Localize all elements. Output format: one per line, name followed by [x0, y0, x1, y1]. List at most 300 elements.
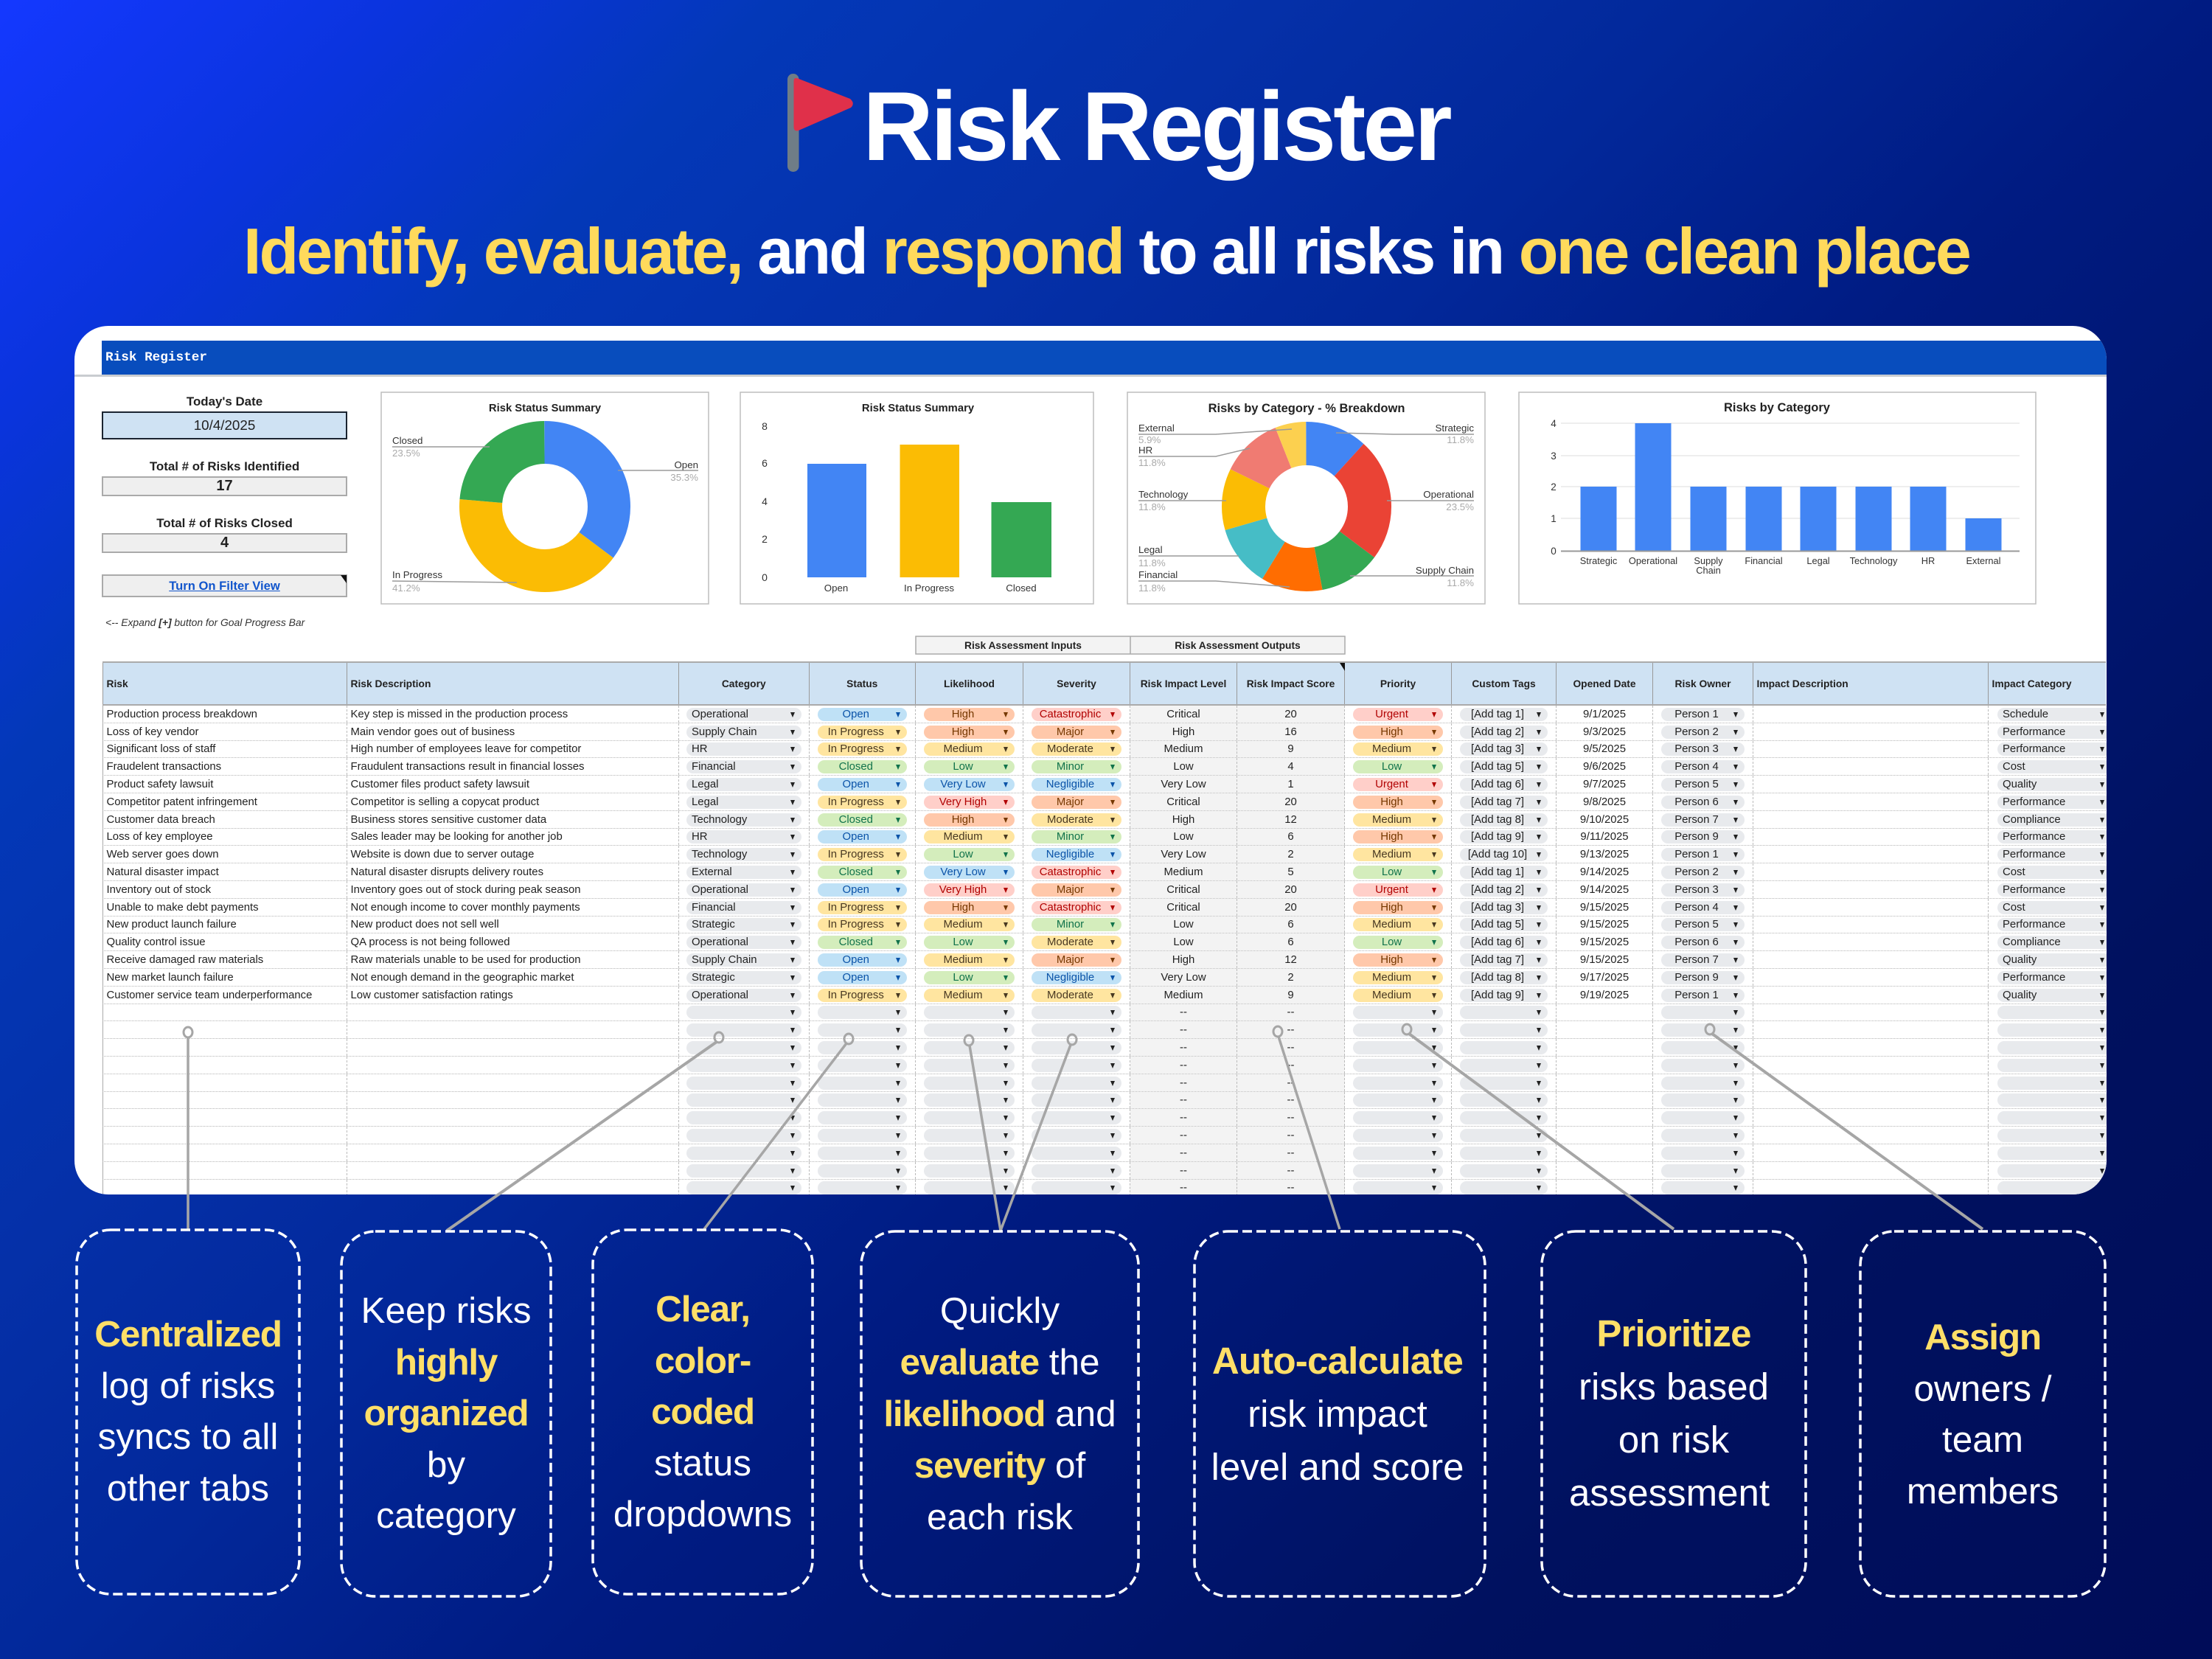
table data rows: Receive damaged raw materials	[106, 954, 263, 966]
table data rows: Natural disaster disrupts delivery routes	[351, 866, 543, 878]
chart: risk status bars: In Progress	[904, 582, 954, 594]
chart: risks by category bars: HR	[1921, 555, 1935, 566]
table data rows: Key step is missed in the production process	[351, 709, 568, 720]
connector: likelihood	[964, 1035, 1001, 1231]
table data rows: --	[1180, 1060, 1187, 1071]
total risks closed value: 4	[220, 535, 229, 551]
chart: risk status bars: 6	[762, 457, 768, 469]
table data rows: Moderate	[1047, 990, 1093, 1001]
table data rows: Critical	[1166, 709, 1200, 720]
charts	[380, 392, 2037, 655]
table data rows: New product does not sell well	[351, 919, 499, 931]
risk assessment group headers: Risk Assessment Inputs	[964, 640, 1082, 651]
table data rows: Performance	[2003, 884, 2065, 896]
table data rows: High	[1380, 831, 1403, 843]
table data rows: Schedule	[2003, 709, 2048, 720]
table data rows: Inventory goes out of stock during peak season	[351, 884, 581, 896]
table data rows: HR	[692, 831, 708, 843]
table data rows: --	[1180, 1130, 1187, 1141]
table data rows: 4	[1287, 761, 1294, 773]
table data rows: Supply Chain	[692, 954, 757, 966]
connector: severity	[1001, 1034, 1077, 1231]
table data rows: High number of employees leave for competitor	[351, 743, 581, 755]
table data rows: --	[1287, 1182, 1294, 1194]
callout: color-coded status: coded	[651, 1391, 754, 1432]
table data rows: High	[952, 709, 974, 720]
table data rows: Negligible	[1046, 972, 1094, 984]
table data rows: --	[1287, 1130, 1294, 1141]
chart: category donut: 11.8%	[1447, 577, 1474, 588]
table data rows: Person 2	[1674, 726, 1719, 738]
table data rows: Person 9	[1674, 831, 1719, 843]
table data rows: Medium	[1164, 743, 1203, 755]
chart: risk status donut: 23.5%	[392, 448, 420, 459]
table data rows: Inventory out of stock	[106, 884, 211, 896]
table header row: Impact Description	[1756, 678, 1848, 689]
table data rows: 16	[1284, 726, 1297, 738]
chart: category donut: Supply Chain	[1416, 565, 1474, 576]
table data rows: Performance	[2003, 972, 2065, 984]
callout: color-coded status: Clear,	[655, 1289, 750, 1329]
table data rows: Performance	[2003, 796, 2065, 808]
callout: likelihood and severity: Quickly	[940, 1290, 1060, 1331]
total risks identified value: 17	[216, 478, 233, 494]
callout: color-coded status: color-	[655, 1340, 751, 1380]
table data rows: [Add tag 2]	[1471, 726, 1524, 738]
table data rows: Quality	[2003, 779, 2037, 790]
table data rows: Compliance	[2003, 814, 2061, 826]
callout: highly organized: category	[376, 1495, 516, 1536]
callout: prioritize	[1540, 1230, 1807, 1598]
callout: likelihood and severity: each risk	[927, 1497, 1073, 1537]
table data rows: Medium	[1372, 849, 1411, 860]
table data rows: 9/8/2025	[1583, 796, 1626, 808]
chart: risk status donut: 41.2%	[392, 582, 420, 594]
table header row: Priority	[1380, 678, 1416, 689]
risk assessment group headers: Risk Assessment Outputs	[1175, 640, 1301, 651]
table data rows: Open	[843, 831, 869, 843]
subtitle: Identify, evaluate, and respond to all risks in one clean place	[243, 215, 1969, 288]
table data rows: Negligible	[1046, 779, 1094, 790]
table data rows: 20	[1284, 796, 1297, 808]
table data rows: Person 1	[1674, 990, 1719, 1001]
callout: assign owners: members	[1907, 1470, 2059, 1512]
chart: risk status donut: 35.3%	[670, 472, 698, 483]
connector: auto-calculate	[1273, 1026, 1340, 1229]
table data rows: High	[952, 902, 974, 914]
chart: risks by category bars: Financial	[1745, 555, 1783, 566]
callout: centralized log	[75, 1228, 301, 1596]
connector: centralized	[184, 1027, 192, 1229]
table data rows: Production process breakdown	[106, 709, 257, 720]
table data rows: Major	[1057, 726, 1084, 738]
table data rows: Medium	[944, 831, 982, 843]
table data rows: --	[1180, 1042, 1187, 1054]
table data rows: Moderate	[1047, 936, 1093, 948]
table data rows: 9/14/2025	[1580, 866, 1629, 878]
table data rows: Medium	[944, 954, 982, 966]
table data rows: Person 1	[1674, 709, 1719, 720]
table data rows: Low	[1173, 936, 1194, 948]
connector: color coded	[704, 1034, 853, 1229]
chart: risks by category bars: Technology	[1850, 555, 1898, 566]
table data rows: --	[1180, 1165, 1187, 1177]
table data rows: [Add tag 9]	[1471, 990, 1524, 1001]
table data rows: Quality	[2003, 990, 2037, 1001]
table header row	[102, 661, 2106, 706]
table data rows: Catastrophic	[1040, 709, 1101, 720]
table data rows: [Add tag 10]	[1468, 849, 1527, 860]
chart: category donut: Financial	[1138, 569, 1178, 580]
table data rows: 20	[1284, 709, 1297, 720]
table data rows: Person 6	[1674, 936, 1719, 948]
callout: prioritize: assessment	[1569, 1472, 1770, 1514]
table data rows: Person 7	[1674, 954, 1719, 966]
table data rows: Medium	[1164, 866, 1203, 878]
total risks identified value	[102, 476, 347, 496]
chart: risk status donut: Closed	[392, 435, 422, 446]
table data rows: Medium	[1372, 990, 1411, 1001]
callout: centralized log: Centralized	[94, 1314, 282, 1354]
table data rows: [Add tag 1]	[1471, 709, 1524, 720]
table data rows: --	[1180, 1077, 1187, 1089]
table data rows: Performance	[2003, 831, 2065, 843]
table data rows: Negligible	[1046, 849, 1094, 860]
table data rows: 9/15/2025	[1580, 919, 1629, 931]
table data rows: Major	[1057, 796, 1084, 808]
table data rows: Critical	[1166, 884, 1200, 896]
callout: auto-calculate: Auto-calculate	[1212, 1340, 1463, 1382]
callout: highly organized: highly	[395, 1342, 497, 1382]
table data rows: [Add tag 7]	[1471, 954, 1524, 966]
table data rows: 12	[1284, 814, 1297, 826]
table data rows: Strategic	[692, 972, 735, 984]
table data rows: 9/17/2025	[1580, 972, 1629, 984]
chart: risks by category bars: Strategic	[1580, 555, 1618, 566]
chart: risks by category bars: External	[1966, 555, 2000, 566]
table data rows: Low	[1382, 866, 1402, 878]
table data rows: --	[1287, 1112, 1294, 1124]
chart: category donut: 11.8%	[1138, 501, 1166, 512]
callout: assign owners: team	[1942, 1419, 2023, 1460]
table data rows: In Progress	[828, 902, 884, 914]
chart: risk status bars: Risk Status Summary	[862, 403, 975, 414]
table data rows: Person 6	[1674, 796, 1719, 808]
table data rows: Closed	[839, 761, 873, 773]
table data rows: Medium	[944, 990, 982, 1001]
table data rows: --	[1180, 1182, 1187, 1194]
chart: risk status donut: In Progress	[392, 569, 442, 580]
connector: prioritize	[1402, 1024, 1674, 1229]
table data rows: Medium	[1372, 972, 1411, 984]
table data rows: 6	[1287, 919, 1294, 931]
table header row: Risk Owner	[1675, 678, 1731, 689]
chart: risk status bars: 8	[762, 420, 768, 432]
table data rows: Person 7	[1674, 814, 1719, 826]
chart: category donut: Technology	[1138, 489, 1189, 500]
table data rows: 9/11/2025	[1580, 831, 1629, 843]
table data rows: High	[1380, 902, 1403, 914]
today's date value	[102, 411, 347, 439]
table header row: Risk Impact Level	[1141, 678, 1226, 689]
chart: category donut: 11.8%	[1447, 434, 1474, 445]
table data rows: [Add tag 6]	[1471, 936, 1524, 948]
table data rows: Low	[953, 936, 973, 948]
table data rows: Urgent	[1375, 709, 1408, 720]
today's date label: Today's Date	[187, 394, 262, 408]
filter view button	[102, 574, 347, 597]
table data rows: Closed	[839, 866, 873, 878]
callout: color-coded status: dropdowns	[613, 1494, 792, 1534]
table header row: Opened Date	[1573, 678, 1636, 689]
callout: likelihood and severity: severity of	[914, 1445, 1085, 1486]
table data rows: Medium	[1372, 919, 1411, 931]
table data rows: 9/6/2025	[1583, 761, 1626, 773]
table data rows: Performance	[2003, 743, 2065, 755]
chart: risk status bars: 4	[762, 495, 768, 507]
table data rows: Raw materials unable to be used for production	[351, 954, 581, 966]
table data rows: In Progress	[828, 990, 884, 1001]
table data rows	[102, 706, 2107, 1194]
callout: likelihood and severity	[860, 1230, 1140, 1598]
table data rows: Website is down due to server outage	[351, 849, 534, 860]
table data rows: --	[1287, 1042, 1294, 1054]
table data rows: Business stores sensitive customer data	[351, 814, 546, 826]
table data rows: 9/15/2025	[1580, 902, 1629, 914]
table data rows: Critical	[1166, 902, 1200, 914]
table data rows: High	[1172, 814, 1194, 826]
table data rows: 9	[1287, 743, 1294, 755]
table data rows: Very High	[939, 884, 987, 896]
table data rows: Financial	[692, 761, 736, 773]
table data rows: Medium	[1164, 990, 1203, 1001]
callout: assign owners: owners /	[1913, 1368, 2052, 1408]
chart: category donut	[1127, 392, 1485, 604]
table data rows: Very Low	[1161, 972, 1206, 984]
chart: risks by category bars: 0	[1551, 546, 1557, 557]
expand note: <-- Expand [+] button for Goal Progress Bar	[105, 616, 305, 628]
table data rows: [Add tag 1]	[1471, 866, 1524, 878]
table data rows: Technology	[692, 849, 747, 860]
table data rows: --	[1180, 1006, 1187, 1018]
table data rows: Fraudelent transactions	[106, 761, 221, 773]
table data rows: Low	[953, 761, 973, 773]
table data rows: 6	[1287, 831, 1294, 843]
table data rows: Very Low	[1161, 779, 1206, 790]
table header row: Custom Tags	[1472, 678, 1536, 689]
table data rows: [Add tag 8]	[1471, 814, 1524, 826]
table data rows: Closed	[839, 936, 873, 948]
chart: category donut: Operational	[1423, 489, 1474, 500]
table data rows: Medium	[1372, 743, 1411, 755]
chart: risks by category bars: Chain	[1696, 565, 1721, 576]
table data rows: Low	[1382, 936, 1402, 948]
table data rows: Performance	[2003, 919, 2065, 931]
table data rows: In Progress	[828, 849, 884, 860]
table data rows: New market launch failure	[106, 972, 234, 984]
chart: category donut: 23.5%	[1446, 501, 1474, 512]
table data rows: Person 5	[1674, 919, 1719, 931]
table data rows: Minor	[1057, 761, 1084, 773]
table data rows: [Add tag 5]	[1471, 761, 1524, 773]
table data rows: 9/7/2025	[1583, 779, 1626, 790]
table data rows: Operational	[692, 990, 748, 1001]
table data rows: Medium	[944, 743, 982, 755]
table data rows: 2	[1287, 972, 1294, 984]
table data rows: Minor	[1057, 919, 1084, 931]
title: Risk Register	[863, 72, 1449, 181]
table data rows: Customer service team underperformance	[106, 990, 312, 1001]
table data rows: Low	[953, 849, 973, 860]
callout: color-coded status: status	[654, 1442, 751, 1484]
table data rows: 6	[1287, 936, 1294, 948]
table data rows: 2	[1287, 849, 1294, 860]
chart: category donut: 11.8%	[1138, 582, 1166, 594]
table data rows: Product safety lawsuit	[106, 779, 213, 790]
table data rows: Low	[1173, 831, 1194, 843]
table data rows: Customer files product safety lawsuit	[351, 779, 529, 790]
table data rows: --	[1287, 1077, 1294, 1089]
table data rows: External	[692, 866, 732, 878]
table data rows: Main vendor goes out of business	[351, 726, 515, 738]
table data rows: Medium	[1372, 814, 1411, 826]
chart: risks by category bars: Risks by Category	[1724, 401, 1831, 414]
table data rows: Operational	[692, 936, 748, 948]
callout: auto-calculate	[1193, 1230, 1486, 1598]
table data rows: 9/1/2025	[1583, 709, 1626, 720]
callout: centralized log: other tabs	[107, 1467, 269, 1509]
table data rows: Open	[843, 972, 869, 984]
chart: category donut: Risks by Category - % Breakdown	[1208, 402, 1405, 415]
table data rows: 9	[1287, 990, 1294, 1001]
table data rows: 9/15/2025	[1580, 936, 1629, 948]
panel: spreadsheet screenshot	[74, 326, 2107, 1194]
table data rows: Legal	[692, 796, 718, 808]
table header row: Severity	[1057, 678, 1096, 689]
table data rows: 12	[1284, 954, 1297, 966]
callout: assign owners: Assign	[1924, 1317, 2041, 1357]
chart: risks by category bars: Operational	[1629, 555, 1677, 566]
table data rows: Supply Chain	[692, 726, 757, 738]
table data rows: --	[1180, 1112, 1187, 1124]
table data rows: In Progress	[828, 796, 884, 808]
table data rows: Major	[1057, 954, 1084, 966]
risk assessment group headers	[916, 636, 1345, 654]
table data rows: Financial	[692, 902, 736, 914]
table data rows: Critical	[1166, 796, 1200, 808]
table header row: Risk Impact Score	[1247, 678, 1335, 689]
today's date value: 10/4/2025	[194, 417, 255, 433]
icon: red flag	[787, 74, 853, 172]
table data rows: Technology	[692, 814, 747, 826]
table data rows: Urgent	[1375, 884, 1408, 896]
table data rows: In Progress	[828, 743, 884, 755]
filter view button: Turn On Filter View	[169, 579, 280, 593]
table data rows: Person 4	[1674, 761, 1719, 773]
table data rows: 9/10/2025	[1580, 814, 1629, 826]
chart: risk status bars: 0	[762, 571, 768, 583]
chart: risks by category bars: Supply	[1694, 555, 1723, 566]
table data rows: Open	[843, 709, 869, 720]
table header row: Risk Description	[351, 678, 431, 689]
connector: assign	[1705, 1024, 1983, 1229]
table data rows: Person 2	[1674, 866, 1719, 878]
table data rows: --	[1287, 1060, 1294, 1071]
total risks identified label: Total # of Risks Identified	[150, 459, 299, 473]
table data rows: Moderate	[1047, 814, 1093, 826]
chart: category donut: 5.9%	[1138, 434, 1161, 445]
table data rows: High	[1380, 796, 1403, 808]
table data rows: High	[952, 726, 974, 738]
chart: category donut: 11.8%	[1138, 457, 1166, 468]
table data rows: --	[1180, 1024, 1187, 1036]
table data rows: Operational	[692, 709, 748, 720]
table data rows: High	[1172, 726, 1194, 738]
table data rows: Moderate	[1047, 743, 1093, 755]
table data rows: Very Low	[940, 866, 986, 878]
chart: risks by category bars: Legal	[1806, 555, 1830, 566]
table data rows: Closed	[839, 814, 873, 826]
table header row: Risk	[106, 678, 128, 689]
table data rows: Competitor patent infringement	[106, 796, 257, 808]
table data rows: [Add tag 3]	[1471, 743, 1524, 755]
table data rows: --	[1180, 1147, 1187, 1159]
table header row: Impact Category	[1992, 678, 2072, 689]
table data rows: Open	[843, 954, 869, 966]
chart: risk status bars: Closed	[1006, 582, 1037, 594]
callout: highly organized: by	[427, 1444, 465, 1485]
table data rows: Natural disaster impact	[106, 866, 219, 878]
chart: risks by category bars: 4	[1551, 418, 1557, 429]
table data rows: Loss of key vendor	[106, 726, 199, 738]
table data rows: [Add tag 7]	[1471, 796, 1524, 808]
table data rows: --	[1287, 1006, 1294, 1018]
table data rows: [Add tag 9]	[1471, 831, 1524, 843]
connector: organized	[447, 1032, 723, 1231]
table data rows: Fraudulent transactions result in financial losses	[351, 761, 585, 773]
table data rows: Compliance	[2003, 936, 2061, 948]
callout: prioritize: on risk	[1618, 1419, 1729, 1461]
chart: risk status donut: Open	[674, 459, 698, 470]
chart: category donut: 11.8%	[1138, 557, 1166, 568]
chart: risk status bars: Open	[824, 582, 848, 594]
table data rows: Medium	[944, 919, 982, 931]
table data rows: Person 4	[1674, 902, 1719, 914]
table data rows: Quality	[2003, 954, 2037, 966]
callout: highly organized	[340, 1230, 552, 1598]
table data rows: Person 9	[1674, 972, 1719, 984]
table data rows: Significant loss of staff	[106, 743, 215, 755]
table data rows: Low	[1173, 761, 1194, 773]
table data rows: Cost	[2003, 761, 2025, 773]
table data rows: In Progress	[828, 726, 884, 738]
table data rows: Low customer satisfaction ratings	[351, 990, 513, 1001]
table data rows: Loss of key employee	[106, 831, 213, 843]
table data rows: Very Low	[1161, 849, 1206, 860]
table data rows: 9/3/2025	[1583, 726, 1626, 738]
header banner	[102, 341, 2107, 375]
table data rows: Not enough income to cover monthly payments	[351, 902, 580, 914]
table data rows: Very Low	[940, 779, 986, 790]
table data rows: Quality control issue	[106, 936, 206, 948]
table data rows: 9/19/2025	[1580, 990, 1629, 1001]
table data rows: HR	[692, 743, 708, 755]
chart: category donut: External	[1138, 422, 1175, 434]
callout: color-coded status	[591, 1228, 814, 1596]
table data rows: Catastrophic	[1040, 866, 1101, 878]
table data rows: Cost	[2003, 902, 2025, 914]
chart: category donut: HR	[1138, 445, 1152, 456]
